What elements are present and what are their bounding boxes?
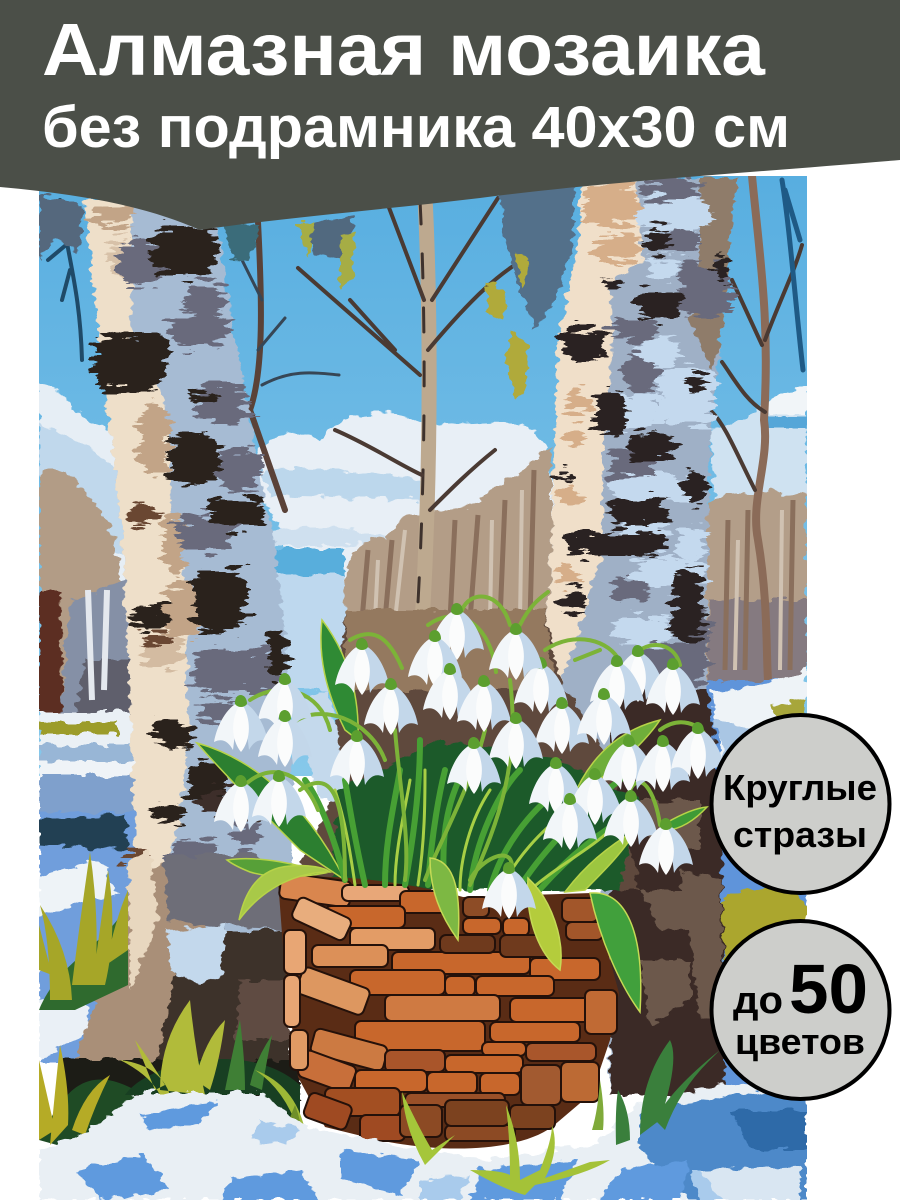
title line 2: без подрамника 40х30 см bbox=[42, 95, 790, 160]
bark patches bbox=[92, 205, 287, 876]
flower stems and leaves bbox=[197, 592, 707, 920]
dark backdrop of the bouquet bbox=[290, 610, 640, 890]
bark patches bbox=[555, 178, 731, 693]
grass in snow bbox=[402, 1040, 720, 1195]
badge: up to 50 colours: до bbox=[733, 980, 783, 1022]
title line 1: Алмазная мозаика bbox=[42, 8, 766, 91]
left birch trunk bbox=[60, 200, 300, 1100]
trunk base bbox=[610, 690, 725, 1095]
right birch trunk bbox=[543, 178, 737, 1095]
badge: round rhinestones: Круглые bbox=[723, 767, 877, 808]
snowdrop flowers bbox=[214, 603, 725, 875]
trunk base bbox=[60, 850, 300, 1100]
clouds bbox=[39, 380, 807, 690]
thin background trees bbox=[48, 176, 803, 680]
badge: up to 50 colours: цветов bbox=[735, 1021, 865, 1062]
bottom snow bbox=[39, 1080, 807, 1200]
badge: up to 50 colours: 50 bbox=[789, 950, 868, 1028]
wicker basket bbox=[278, 872, 619, 1149]
badge: round rhinestones bbox=[712, 715, 890, 893]
leaves over basket rim bbox=[430, 858, 641, 1012]
sky bbox=[39, 176, 807, 776]
cream bark strip bbox=[85, 200, 189, 900]
painting: snowdrops in a basket by birch trees bbox=[39, 176, 807, 1200]
header banner bbox=[0, 0, 900, 230]
hanging foliage bbox=[39, 186, 575, 400]
distant tree line bbox=[39, 445, 807, 725]
right ground bbox=[700, 668, 807, 1100]
left ground bbox=[39, 712, 139, 1062]
tan bark strip bbox=[690, 178, 737, 370]
grass tufts left bbox=[39, 852, 305, 1155]
cream bark strip bbox=[543, 178, 643, 680]
badge: round rhinestones: стразы bbox=[733, 814, 867, 855]
badge: up to 50 colours bbox=[712, 921, 890, 1099]
